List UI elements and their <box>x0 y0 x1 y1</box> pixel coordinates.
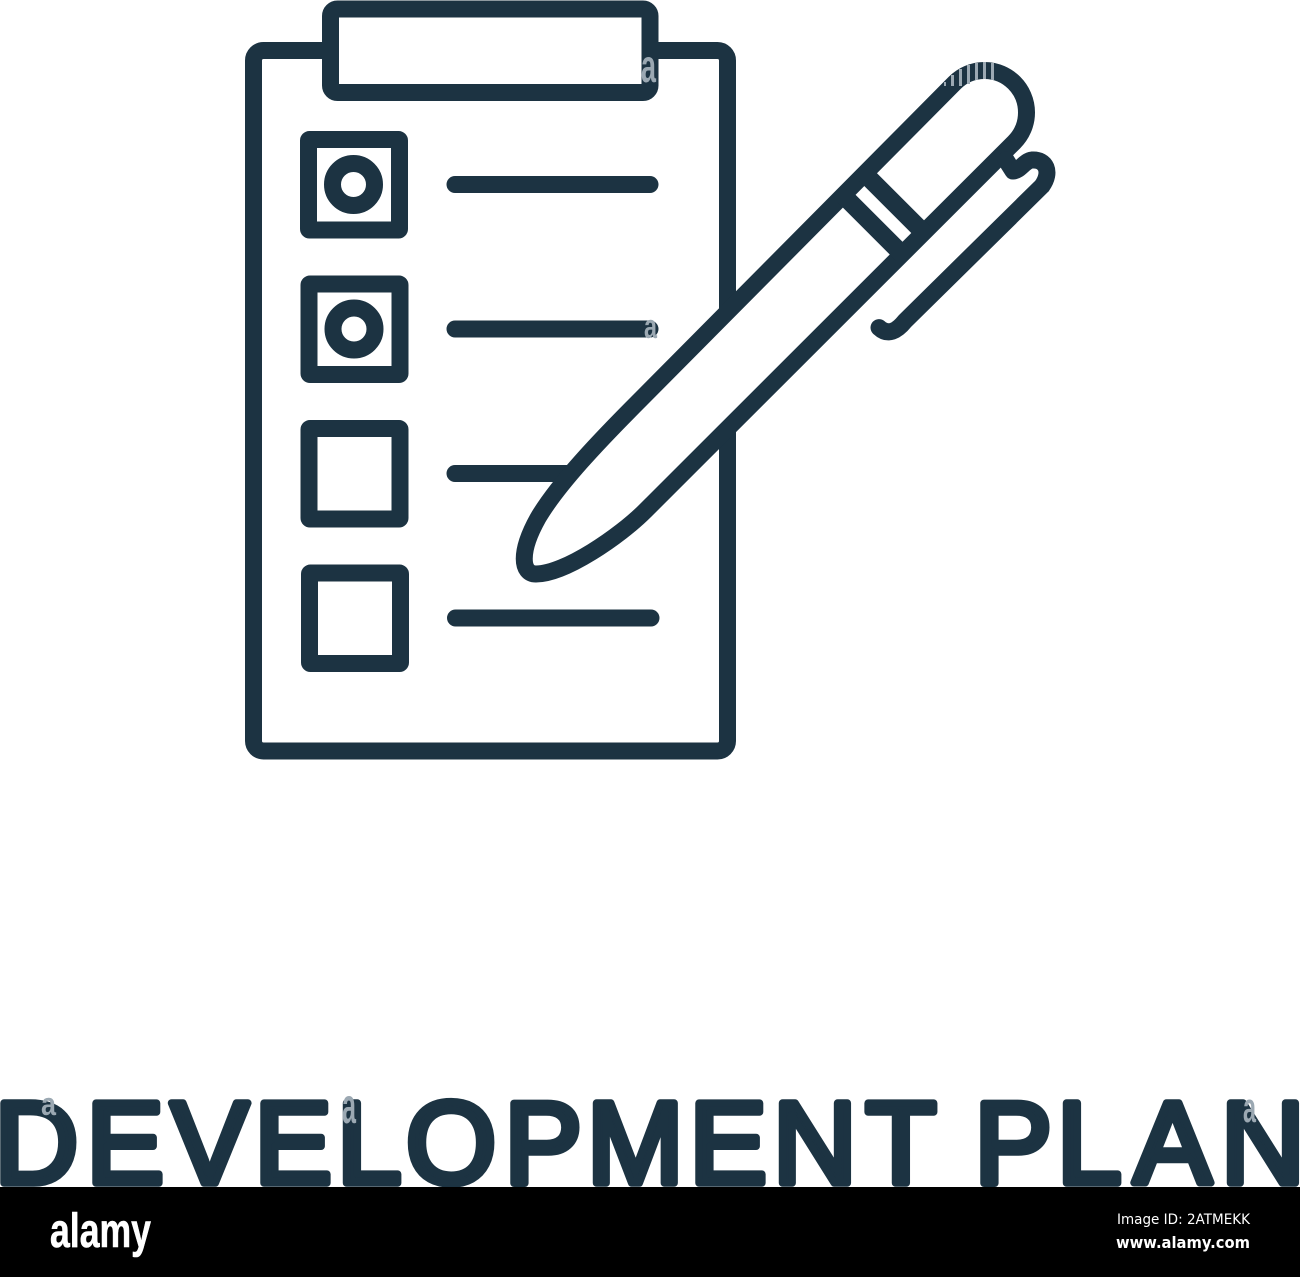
watermark: letter N: a <box>1243 1084 1256 1131</box>
clipboard clip <box>330 9 650 92</box>
checklist row 1: checked box <box>308 140 400 230</box>
watermark fragments <box>641 40 994 346</box>
watermark: pen cap stripes <box>944 62 994 86</box>
checklist row 4: line <box>456 610 651 626</box>
checklist row 4: empty box <box>310 573 400 664</box>
footer website: www.alamy.com <box>1116 1233 1250 1252</box>
watermark: clip corner: a <box>641 40 656 92</box>
checklist row 2: checked box <box>309 284 400 374</box>
footer image id: Image ID: 2ATMEKK <box>1117 1212 1251 1228</box>
checklist row 3: line <box>455 465 600 482</box>
footer logo: alamy: alamy <box>50 1205 151 1258</box>
watermark: letter D: a <box>41 1086 56 1122</box>
checklist row 3: empty box <box>309 428 400 519</box>
watermark: line two: a <box>644 308 658 346</box>
icon: pen <box>524 70 1047 574</box>
footer bar <box>0 1187 1300 1277</box>
watermark: letter L: a <box>342 1078 357 1134</box>
title: DEVELOPMENT PLAN <box>0 1078 1300 1208</box>
pen clip <box>879 160 1047 332</box>
icon: clipboard with checklist <box>254 9 728 751</box>
clipboard board <box>254 50 728 751</box>
checklist row 2: line <box>455 320 650 338</box>
pen band <box>844 174 924 254</box>
watermark fragments on title <box>41 1078 1256 1134</box>
pen body and cap <box>524 70 1027 574</box>
checklist row 1: line <box>455 176 650 193</box>
